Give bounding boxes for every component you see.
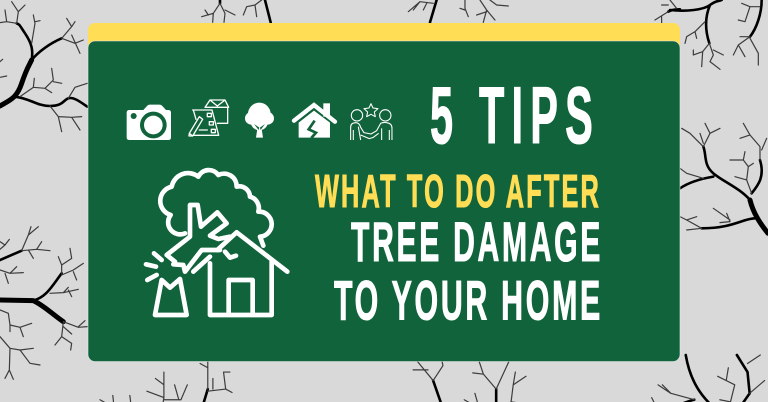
broken stump — [155, 279, 187, 315]
icon: handshake with star — [351, 104, 392, 140]
icon: checklist and building — [189, 100, 229, 136]
tree crown outline — [160, 170, 272, 246]
icon: camera — [127, 105, 171, 140]
yellow backing card — [88, 23, 680, 63]
broken trunk — [167, 205, 230, 272]
green main panel — [88, 41, 680, 362]
impact sparks — [146, 253, 162, 280]
icon: tree — [245, 103, 274, 138]
icon: damaged house — [294, 103, 335, 138]
house outline — [193, 232, 287, 315]
icon: tree fallen on house — [146, 170, 287, 315]
title: 5 TIPS: 5 TIPS — [430, 71, 600, 161]
